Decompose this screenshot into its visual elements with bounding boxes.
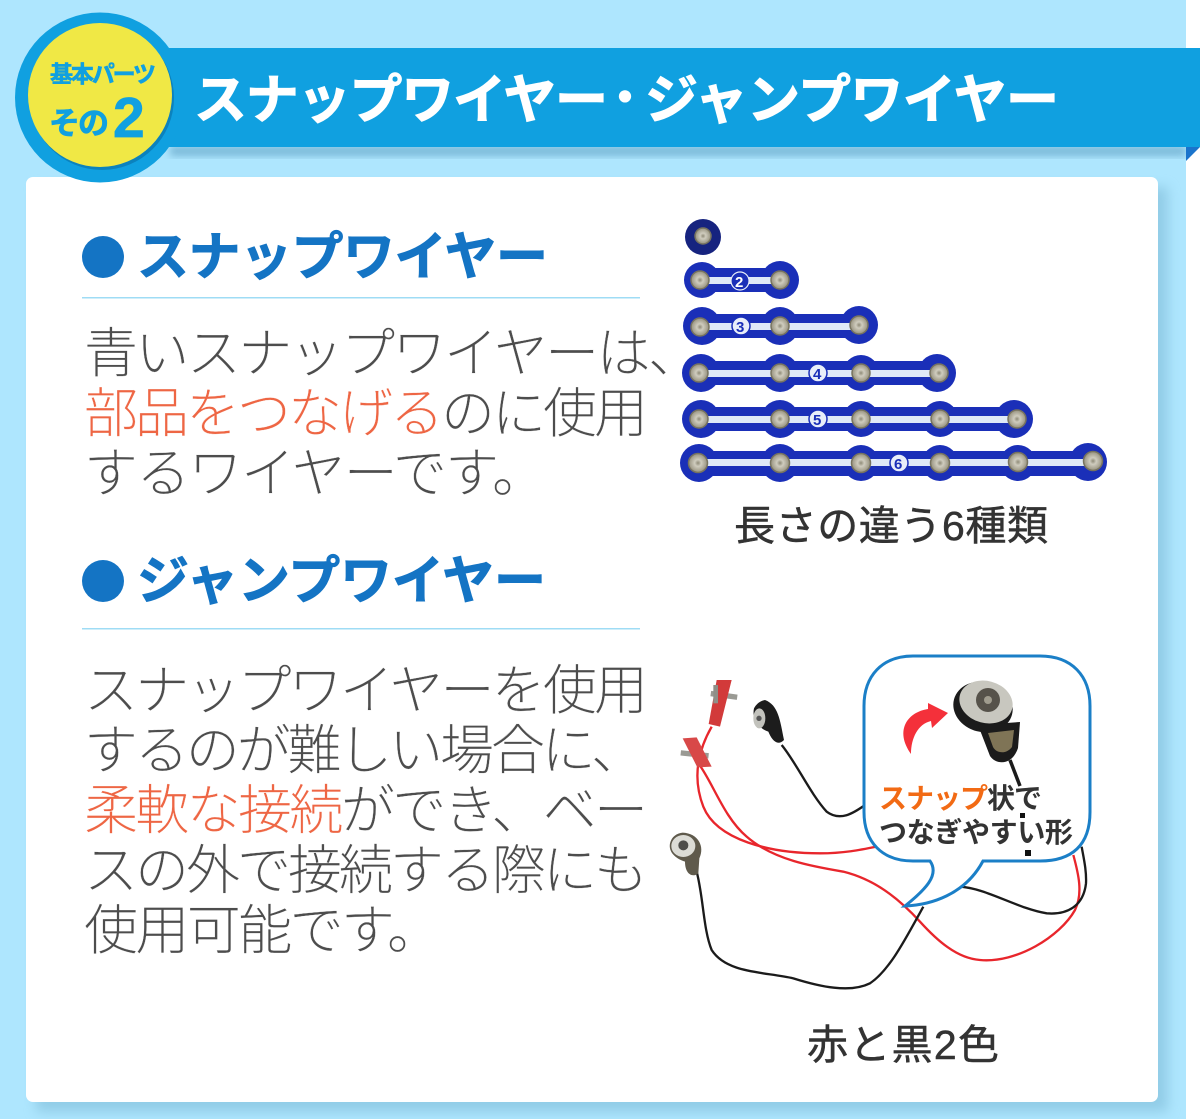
panel: main white card	[26, 177, 1158, 1102]
divider	[82, 628, 640, 630]
header band shadow	[170, 146, 1186, 156]
panel shadow	[36, 187, 1168, 1112]
section: snap wire: するワイヤーです。	[84, 444, 546, 504]
red wires	[697, 727, 1079, 960]
badge	[15, 12, 185, 182]
black wires	[697, 745, 1086, 988]
description: 青いスナップワイヤーは、	[84, 324, 702, 384]
bullet	[82, 236, 124, 278]
section: jump wire: スの外で接続する際にも	[84, 841, 648, 901]
banner fold	[1186, 147, 1200, 161]
heading: スナップワイヤー	[137, 229, 548, 287]
snap wire 3	[683, 306, 878, 345]
snap wire 2: 2	[735, 274, 743, 291]
bullet	[82, 560, 124, 602]
badge inner shadow	[30, 26, 174, 170]
badge label: 基本パーツ	[50, 61, 156, 87]
badge number label: その	[49, 106, 109, 141]
heading: ジャンプワイヤー	[137, 553, 546, 611]
wire specks over text	[1020, 813, 1031, 856]
snap wire 4	[682, 354, 956, 392]
black connector	[753, 700, 784, 743]
callout: snap-shaped connector	[864, 656, 1090, 906]
red connectors	[680, 680, 738, 767]
title: スナップワイヤー	[194, 71, 608, 130]
badge yellow circle	[28, 23, 172, 167]
snap wires photo: six lengths	[680, 219, 1107, 482]
title: ・	[603, 74, 647, 123]
snap wire 3: 3	[736, 319, 744, 336]
section: jump wire: 柔軟な接続ができ、ベー	[84, 781, 648, 841]
arrow icon	[903, 703, 948, 754]
section: snap wire	[82, 229, 702, 504]
badge number: 2	[113, 86, 145, 150]
title: ジャンプワイヤー	[645, 71, 1059, 130]
jump wires photo	[670, 680, 1086, 988]
description: スナップワイヤーを使用	[84, 661, 648, 721]
banner band	[165, 48, 1200, 147]
badge outer circle	[15, 12, 185, 182]
section: jump wire: 使用可能です。	[84, 901, 441, 961]
snap wire 1	[685, 219, 721, 255]
header banner	[165, 48, 1200, 161]
snap wire 6: 6	[894, 456, 902, 473]
callout: snap-shaped connector: つなぎやすい形	[879, 817, 1073, 848]
snap wire 5: 5	[813, 412, 821, 429]
snap wire 5	[682, 400, 1033, 438]
snap wire 6	[680, 443, 1107, 482]
section: jump wire	[82, 553, 648, 961]
enlarged connector	[948, 675, 1020, 786]
snap wire 2	[684, 261, 799, 299]
callout bubble	[864, 656, 1090, 906]
snap wire 4: 4	[813, 366, 822, 383]
section: jump wire: するのが難しい場合に、	[84, 721, 645, 781]
section: snap wire: 部品をつなげるのに使用	[84, 384, 648, 444]
caption: six kinds: 長さの違う6種類	[734, 503, 1048, 549]
title	[194, 71, 1059, 130]
caption: two colours: 赤と黒2色	[807, 1022, 999, 1068]
divider	[82, 297, 640, 298]
callout text: スナップ状で	[879, 783, 1042, 814]
silver connector	[670, 833, 701, 875]
